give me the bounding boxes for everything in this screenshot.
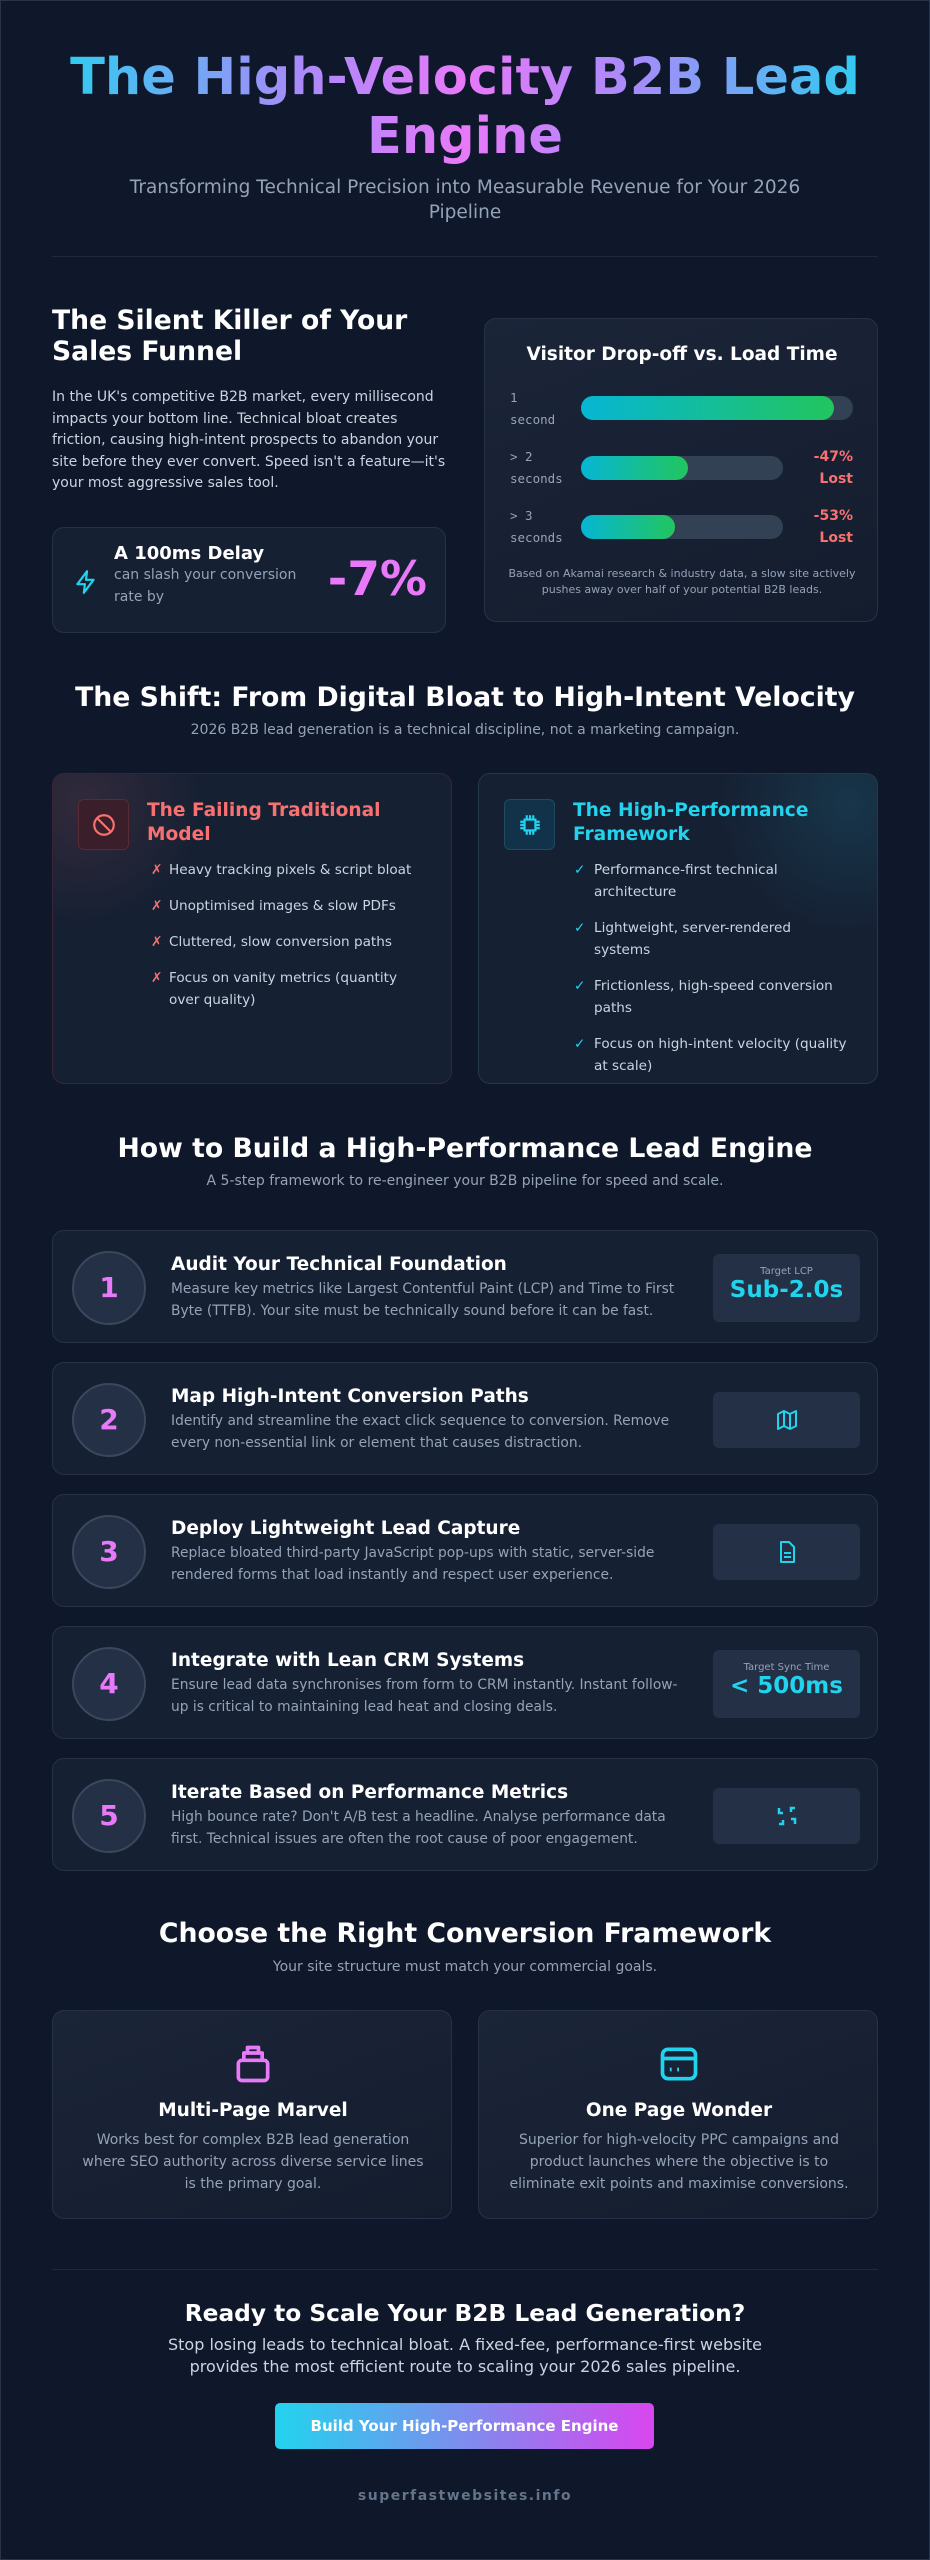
icon: document	[713, 1524, 860, 1580]
step 3	[52, 1494, 878, 1607]
title: Engine	[367, 107, 563, 166]
row 1	[510, 390, 555, 427]
step 5: High bounce rate? Don't A/B test a headline. Analyse performance data first. Technical issues are often the root cause of poor engagement.	[171, 1809, 666, 1847]
row 3: > 3	[510, 508, 533, 523]
panel: failing model: ✗	[151, 970, 162, 986]
chart: drop-off panel: -47%	[814, 449, 853, 465]
panel: multi-page marvel	[52, 2010, 452, 2219]
step 3: Deploy Lightweight Lead Capture	[171, 1518, 520, 1539]
bullet list	[574, 862, 847, 1074]
bullet list: paths	[594, 1000, 632, 1016]
icon: stack	[236, 2046, 270, 2082]
metric: sync time: Target Sync Time	[744, 1662, 829, 1673]
panel: high-performance framework: ✓	[574, 1036, 585, 1052]
step 1	[52, 1230, 878, 1343]
bullet list: Performance-first technical	[594, 862, 778, 878]
bullet list: Frictionless, high-speed conversion	[594, 978, 833, 994]
bullet list: at scale)	[594, 1058, 652, 1074]
step 5: 5	[99, 1799, 119, 1832]
step 2: Map High-Intent Conversion Paths	[171, 1386, 529, 1407]
CTA heading: Ready to Scale Your B2B Lead Generation?	[185, 2300, 745, 2327]
title	[40, 48, 890, 166]
callout: 100ms delay	[52, 527, 446, 633]
bullet list: architecture	[594, 884, 676, 900]
step 1: Measure key metrics like Largest Contentful Paint (LCP) and Time to First Byte (TTFB). Your site must be technically sound before it can be fast.	[171, 1281, 674, 1319]
step 2: Identify and streamline the exact click sequence to conversion. Remove every non-essential link or element that causes distraction.	[171, 1413, 669, 1451]
metric: target LCP	[713, 1254, 860, 1322]
icon: card	[660, 2048, 698, 2080]
bullet list	[151, 862, 411, 1008]
heading: silent killer: The Silent Killer of Your Sales Funnel	[52, 305, 407, 367]
icon: scan	[713, 1788, 860, 1844]
CTA button: Build Your High-Performance Engine	[311, 2417, 618, 2435]
subheading: 2026 B2B lead generation is a technical discipline, not a marketing campaign.	[191, 722, 739, 738]
step 1: Audit Your Technical Foundation	[171, 1254, 507, 1275]
CTA button	[275, 2403, 654, 2449]
panel: high-performance framework	[478, 773, 878, 1084]
bullet list: Unoptimised images & slow PDFs	[169, 898, 396, 914]
panel: failing model: ✗	[151, 934, 162, 950]
panel title: The Failing Traditional Model	[147, 800, 381, 845]
step 2	[52, 1362, 878, 1475]
step 4	[52, 1626, 878, 1739]
row 1: 1	[510, 390, 518, 405]
title: Multi-Page Marvel	[158, 2100, 348, 2121]
metric: sync time: < 500ms	[730, 1673, 843, 1699]
step 5	[52, 1758, 878, 1871]
panel: one page wonder	[478, 2010, 878, 2219]
panel: high-performance framework: ✓	[574, 978, 585, 994]
CTA text: Stop losing leads to technical bloat. A fixed-fee, performance-first website provides the most efficient route to scaling your 2026 sales pipeline.	[168, 2335, 762, 2376]
description: Works best for complex B2B lead generation where SEO authority across diverse service lines is the primary goal.	[82, 2132, 424, 2192]
callout text: can slash your conversion rate by	[114, 567, 296, 605]
metric: sync time	[713, 1650, 860, 1718]
chart: drop-off panel: Lost	[819, 530, 853, 546]
bullet list: Lightweight, server-rendered	[594, 920, 791, 936]
stat: -7%	[328, 552, 427, 607]
panel: failing model: ✗	[151, 898, 162, 914]
row 3: seconds	[510, 530, 563, 545]
panel: high-performance framework: ✓	[574, 862, 585, 878]
panel: failing model	[52, 773, 452, 1084]
metric: target LCP: Target LCP	[760, 1266, 813, 1277]
bullet list: over quality)	[169, 992, 255, 1008]
row 3	[510, 508, 563, 545]
chart note: Based on Akamai research & industry data, a slow site actively pushes away over half of your potential B2B leads.	[508, 567, 856, 596]
title: The High-Velocity B2B Lead	[70, 48, 860, 107]
bullet list: Focus on high-intent velocity (quality	[594, 1036, 847, 1052]
icon: chip	[504, 799, 555, 850]
icon: map	[713, 1392, 860, 1448]
step 4: 4	[99, 1667, 119, 1700]
text block: intro paragraph: In the UK's competitive B2B market, every millisecond impacts your bottom line. Technical bloat creates friction, causing high-intent prospects to abandon your site before they ever convert. Speed isn't a feature—it's your most aggressive sales tool.	[52, 389, 445, 491]
heading: the shift: The Shift: From Digital Bloat to High-Intent Velocity	[75, 682, 855, 713]
heading: choose framework: Choose the Right Conversion Framework	[159, 1918, 771, 1949]
bullet list: Focus on vanity metrics (quantity	[169, 970, 397, 986]
row 2	[510, 449, 563, 486]
bullet list: Cluttered, slow conversion paths	[169, 934, 392, 950]
step 4: Ensure lead data synchronises from form to CRM instantly. Instant follow-up is critical to maintaining lead heat and closing deals.	[171, 1677, 678, 1715]
callout text: A 100ms Delay	[114, 543, 264, 564]
chart title: Visitor Drop-off vs. Load Time	[526, 344, 838, 365]
bullet list: Heavy tracking pixels & script bloat	[169, 862, 411, 878]
chart: drop-off panel	[484, 318, 878, 622]
description: Superior for high-velocity PPC campaigns and product launches where the objective is to eliminate exit points and maximise conversions.	[509, 2132, 849, 2192]
step 3: 3	[99, 1535, 119, 1568]
bullet list: systems	[594, 942, 650, 958]
panel: failing model: ✗	[151, 862, 162, 878]
callout text	[114, 543, 296, 605]
panel: high-performance framework: ✓	[574, 920, 585, 936]
metric: target LCP: Sub-2.0s	[730, 1277, 843, 1303]
step 4: Integrate with Lean CRM Systems	[171, 1650, 524, 1671]
subheading: Your site structure must match your commercial goals.	[273, 1959, 657, 1975]
step 2: 2	[99, 1403, 119, 1436]
title: One Page Wonder	[586, 2100, 772, 2121]
row 2: > 2	[510, 449, 533, 464]
chart: drop-off panel: -53%	[814, 508, 853, 524]
row 1: second	[510, 412, 555, 427]
subtitle: Transforming Technical Precision into Measurable Revenue for Your 2026 Pipeline	[130, 177, 800, 223]
subheading: A 5-step framework to re-engineer your B2B pipeline for speed and scale.	[206, 1173, 724, 1189]
panel title: The High-Performance Framework	[573, 800, 808, 845]
footer: superfastwebsites.info	[358, 2488, 572, 2504]
row 2: seconds	[510, 471, 563, 486]
step 1: 1	[99, 1271, 119, 1304]
chart: drop-off panel: Lost	[819, 471, 853, 487]
heading: how to build: How to Build a High-Performance Lead Engine	[117, 1133, 813, 1164]
step 5: Iterate Based on Performance Metrics	[171, 1782, 568, 1803]
icon: lightning	[76, 570, 95, 594]
step 3: Replace bloated third-party JavaScript pop-ups with static, server-side rendered forms that load instantly and respect user experience.	[171, 1545, 654, 1583]
icon: prohibited	[78, 799, 129, 850]
